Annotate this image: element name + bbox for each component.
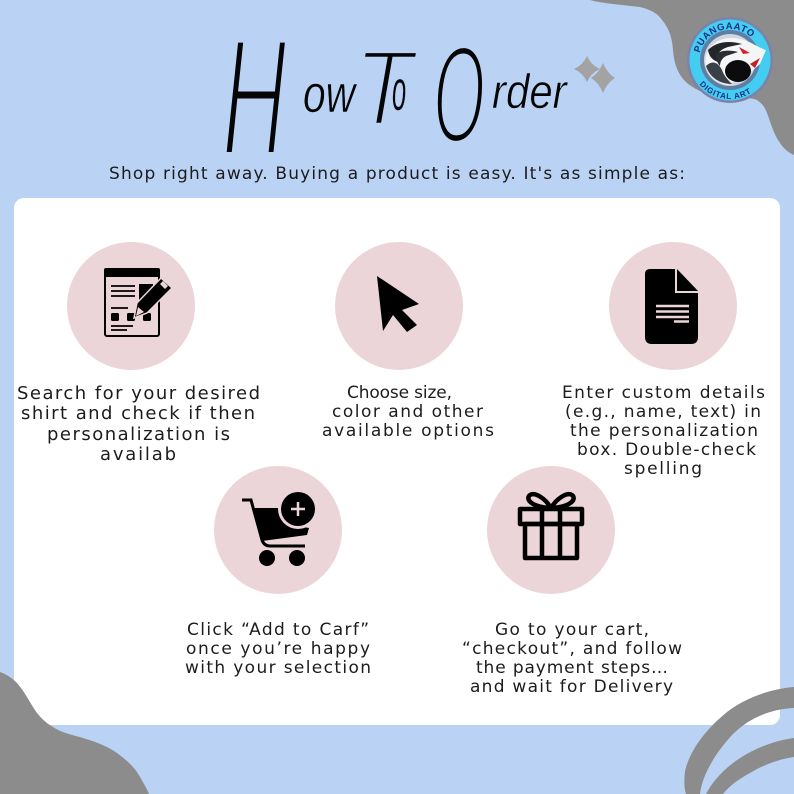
icon: gift box	[487, 466, 615, 594]
text: step 2: Choose size,	[347, 383, 452, 403]
step 1: search	[17, 242, 260, 465]
title: T	[354, 28, 419, 148]
text: step 2	[322, 383, 494, 441]
step 4: add to cart	[185, 466, 371, 678]
step 2: choose options	[322, 242, 494, 441]
text: step 3	[562, 383, 765, 479]
title: ow	[303, 64, 358, 123]
text: step 2: color and other	[332, 402, 483, 422]
icon: sparkles	[574, 56, 615, 93]
decorative blob: bottom left	[0, 672, 149, 794]
text: step 3: box. Double-check	[577, 440, 756, 460]
icon: shopping cart with plus	[214, 466, 342, 594]
text: step 3: (e.g., name, text) in	[565, 402, 761, 422]
text: step 1	[17, 383, 260, 465]
title	[222, 4, 569, 191]
text: step 1: shirt and check if then	[21, 403, 255, 424]
text: step 1: availab	[100, 444, 176, 465]
title: o	[392, 60, 406, 123]
logo badge	[687, 17, 773, 103]
subtitle: Shop right away. Buying a product is easy. It's as simple as:	[109, 164, 685, 184]
icon: cursor arrow	[335, 242, 463, 370]
text: step 2: available options	[322, 421, 494, 441]
text: step 5: and wait for Delivery	[470, 677, 673, 697]
text: step 1: Search for your desired	[17, 383, 260, 404]
decorative blob: top right	[590, 0, 794, 155]
text: step 5: the payment steps…	[476, 658, 668, 678]
text: step 4: with your selection	[185, 658, 371, 678]
icon: form with pencil	[67, 242, 195, 370]
text: step 3: spelling	[624, 459, 702, 479]
icon: document	[609, 242, 737, 370]
text: step 5: “checkout”, and follow	[462, 639, 682, 659]
title: O	[433, 17, 485, 171]
text: step 5: Go to your cart,	[495, 620, 649, 640]
text: step 1: personalization is	[47, 424, 230, 445]
logo badge: PUANGAATO	[694, 22, 754, 52]
white content card	[14, 198, 780, 725]
step 5: checkout	[462, 466, 682, 697]
text: step 3: the personalization	[570, 421, 758, 441]
text: step 4: once you’re happy	[186, 639, 370, 659]
logo badge: DIGITAL ART	[700, 80, 750, 99]
text: step 3: Enter custom details	[562, 383, 765, 403]
step 3: custom details	[562, 242, 765, 479]
text: step 4: Click “Add to Carf”	[187, 620, 369, 640]
text: step 4	[185, 620, 371, 678]
title: rder	[492, 64, 569, 119]
title: H	[222, 4, 287, 191]
text: step 5	[462, 620, 682, 697]
decorative arcs: bottom right	[684, 687, 794, 794]
